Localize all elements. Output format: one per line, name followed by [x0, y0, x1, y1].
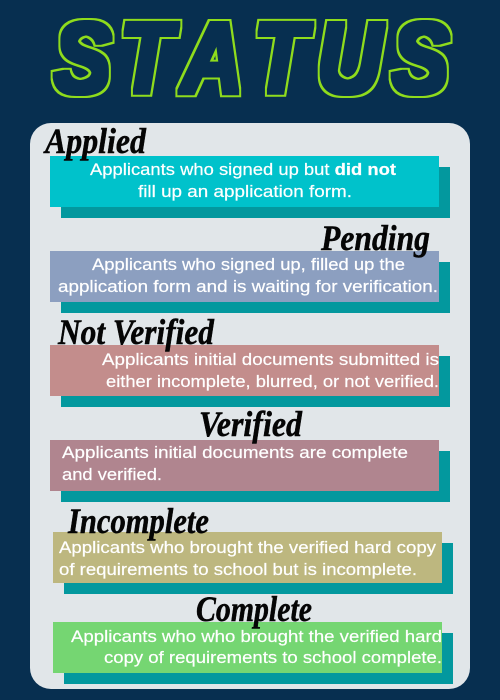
title: S — [392, 2, 449, 114]
title: T — [254, 2, 313, 114]
description: not verified: Applicants initial documents submitted is — [102, 351, 439, 369]
panel: applied — [43, 121, 450, 218]
description: pending — [58, 256, 438, 296]
description: not verified: either incomplete, blurred, or not verified. — [106, 373, 439, 391]
description: applied: fill up an application form. — [138, 183, 352, 201]
panel: complete — [53, 589, 453, 684]
panel: pending — [50, 218, 450, 313]
description: complete — [71, 628, 442, 667]
panel: incomplete — [53, 501, 453, 594]
description: applied — [90, 161, 397, 201]
heading: verified: Verified — [199, 404, 303, 444]
heading: applied: Applied — [43, 121, 147, 161]
description: incomplete: Applicants who brought the verified hard copy — [59, 539, 437, 557]
description: incomplete: of requirements to school but is incomplete. — [59, 561, 417, 579]
heading: incomplete: Incomplete — [67, 501, 209, 541]
title: U — [317, 3, 384, 115]
title: T — [120, 2, 179, 114]
panel: verified — [50, 404, 450, 502]
description: verified: Applicants initial documents are complete — [62, 444, 408, 462]
title: A — [180, 2, 243, 114]
panel: status list — [30, 121, 470, 689]
description: verified — [62, 444, 408, 484]
description: pending: Applicants who signed up, filled up the — [92, 256, 405, 274]
panel: not verified — [50, 312, 450, 407]
heading: pending: Pending — [320, 218, 430, 258]
description: complete: Applicants who who brought the verified hard — [71, 628, 442, 646]
description: pending: application form and is waiting for verification. — [58, 278, 438, 296]
title — [54, 2, 449, 115]
heading: not verified: Not Verified — [57, 312, 215, 352]
description: complete: copy of requirements to school complete. — [104, 649, 442, 667]
description: verified: and verified. — [62, 466, 162, 484]
description: incomplete — [59, 539, 437, 579]
description: applied: Applicants who signed up but did not — [90, 161, 397, 179]
description: not verified — [102, 351, 439, 391]
title: S — [54, 2, 111, 114]
heading: complete: Complete — [196, 589, 312, 629]
